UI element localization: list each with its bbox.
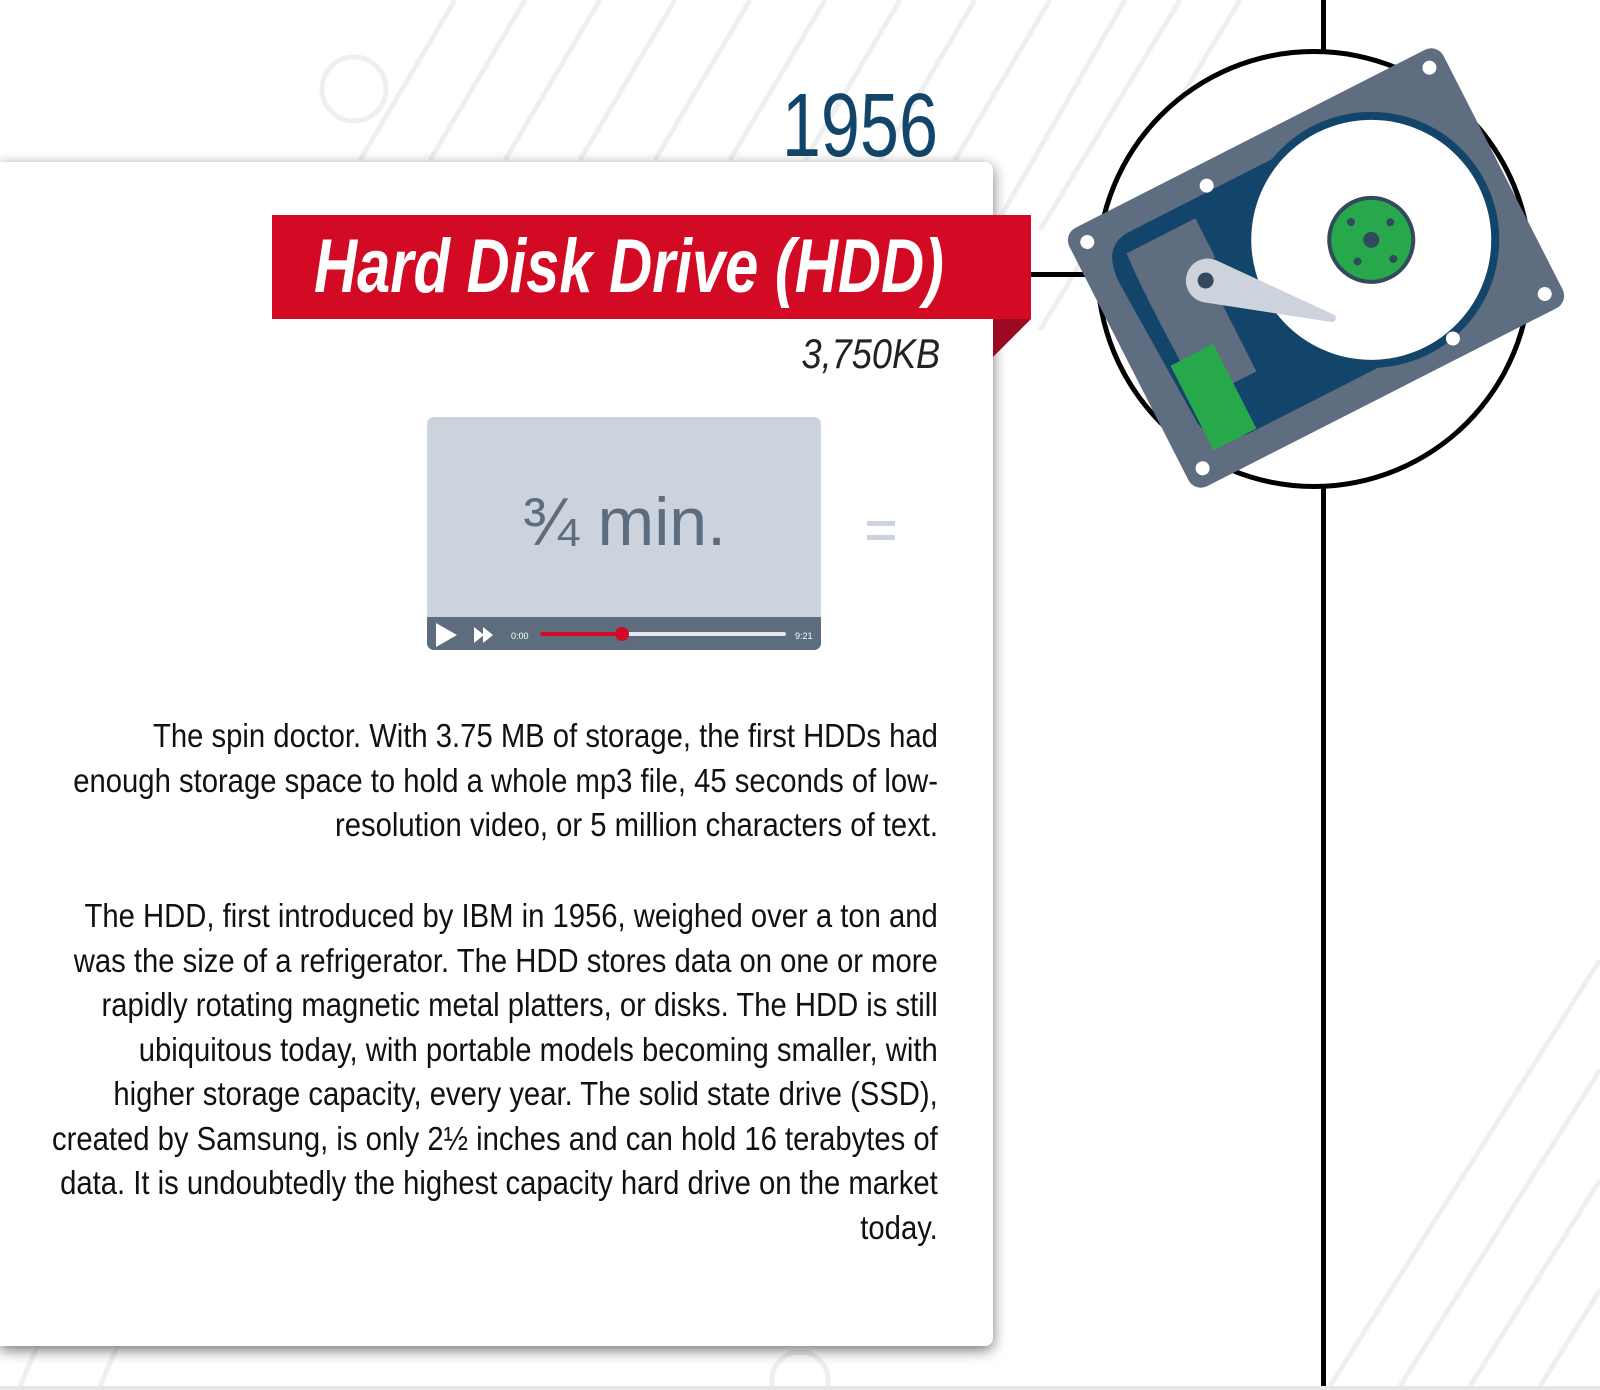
video player icon: 9:21 bbox=[795, 631, 813, 641]
paragraph 2: rapidly rotating magnetic metal platters, or disks. The HDD is still bbox=[102, 986, 938, 1023]
video player icon: ¾ min. bbox=[522, 484, 726, 560]
paragraph 2: ubiquitous today, with portable models becoming smaller, with bbox=[139, 1030, 938, 1068]
paragraph 1: enough storage space to hold a whole mp3 file, 45 seconds of low- bbox=[73, 762, 938, 798]
paragraph 2: created by Samsung, is only 2½ inches and can hold 16 terabytes of bbox=[52, 1120, 938, 1156]
paragraph 2 bbox=[52, 897, 938, 1246]
size label: 3,750KB bbox=[801, 330, 940, 377]
paragraph 1: resolution video, or 5 million characters of text. bbox=[335, 806, 938, 843]
video player icon bbox=[427, 417, 821, 650]
paragraph 2: today. bbox=[861, 1208, 938, 1246]
icon: timeline circle bbox=[1095, 49, 1533, 489]
title banner: Hard Disk Drive (HDD) bbox=[314, 224, 944, 309]
video player icon: 0:00 bbox=[511, 631, 529, 641]
paragraph 2: higher storage capacity, every year. The solid state drive (SSD), bbox=[114, 1075, 938, 1112]
ribbon fold bbox=[993, 319, 1031, 357]
paragraph 2: was the size of a refrigerator. The HDD stores data on one or more bbox=[74, 942, 938, 978]
paragraph 1 bbox=[73, 717, 938, 843]
timeline line bbox=[1321, 0, 1326, 1386]
equals sign bbox=[867, 521, 895, 540]
year: 1956 bbox=[782, 76, 938, 176]
panel: card bbox=[0, 162, 993, 1346]
paragraph 1: The spin doctor. With 3.75 MB of storage, the first HDDs had bbox=[153, 717, 938, 754]
connector line bbox=[1031, 272, 1101, 277]
icon: hard disk drive bbox=[1068, 48, 1564, 488]
paragraph 2: The HDD, first introduced by IBM in 1956, weighed over a ton and bbox=[85, 897, 938, 934]
title banner bbox=[272, 215, 1031, 319]
paragraph 2: data. It is undoubtedly the highest capacity hard drive on the market bbox=[60, 1164, 938, 1201]
